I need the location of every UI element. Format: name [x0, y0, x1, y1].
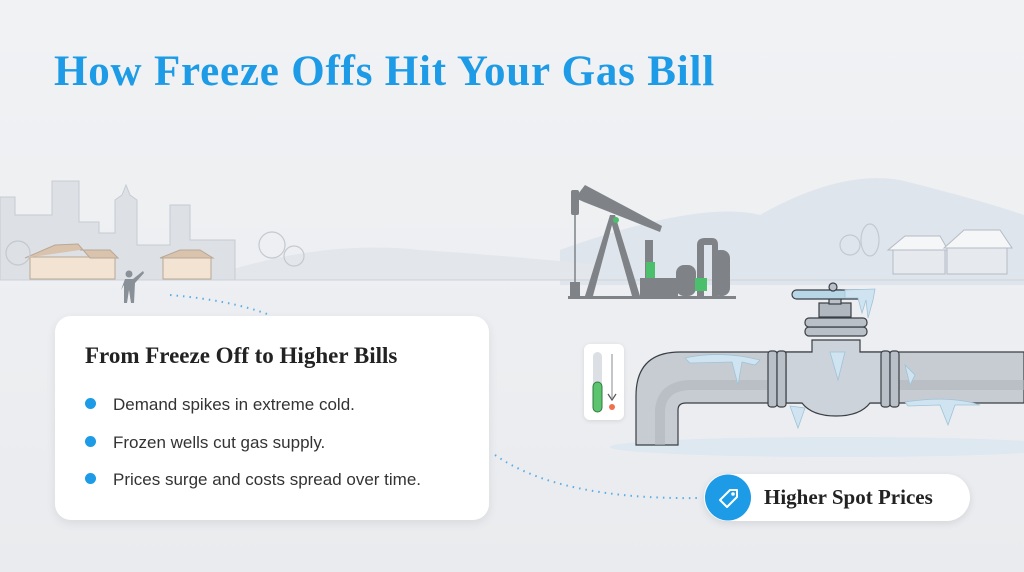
houses left	[25, 244, 213, 279]
bullet 3: Prices surge and costs spread over time.	[113, 470, 421, 489]
callout: higher spot prices	[704, 474, 970, 521]
title: How Freeze Offs Hit Your Gas Bill	[54, 48, 715, 95]
snow under pipe	[610, 437, 1024, 457]
city skyline	[0, 181, 235, 280]
pipe	[636, 283, 1024, 445]
panel: from freeze off to higher bills	[55, 316, 489, 520]
trees	[6, 224, 879, 266]
ground line	[0, 279, 1024, 281]
person	[121, 270, 144, 303]
houses right	[888, 230, 1012, 274]
bullet 1: Demand spikes in extreme cold.	[113, 395, 355, 414]
icon: supply gauge	[584, 344, 624, 420]
hills	[230, 178, 1024, 285]
card heading: From Freeze Off to Higher Bills	[85, 343, 397, 368]
pumpjack and plant	[568, 185, 736, 299]
ice	[685, 289, 980, 428]
dotted paths	[170, 295, 270, 315]
icon: price tag	[705, 474, 751, 520]
callout: higher spot prices: Higher Spot Prices	[764, 485, 933, 509]
bullet 2: Frozen wells cut gas supply.	[113, 433, 325, 452]
